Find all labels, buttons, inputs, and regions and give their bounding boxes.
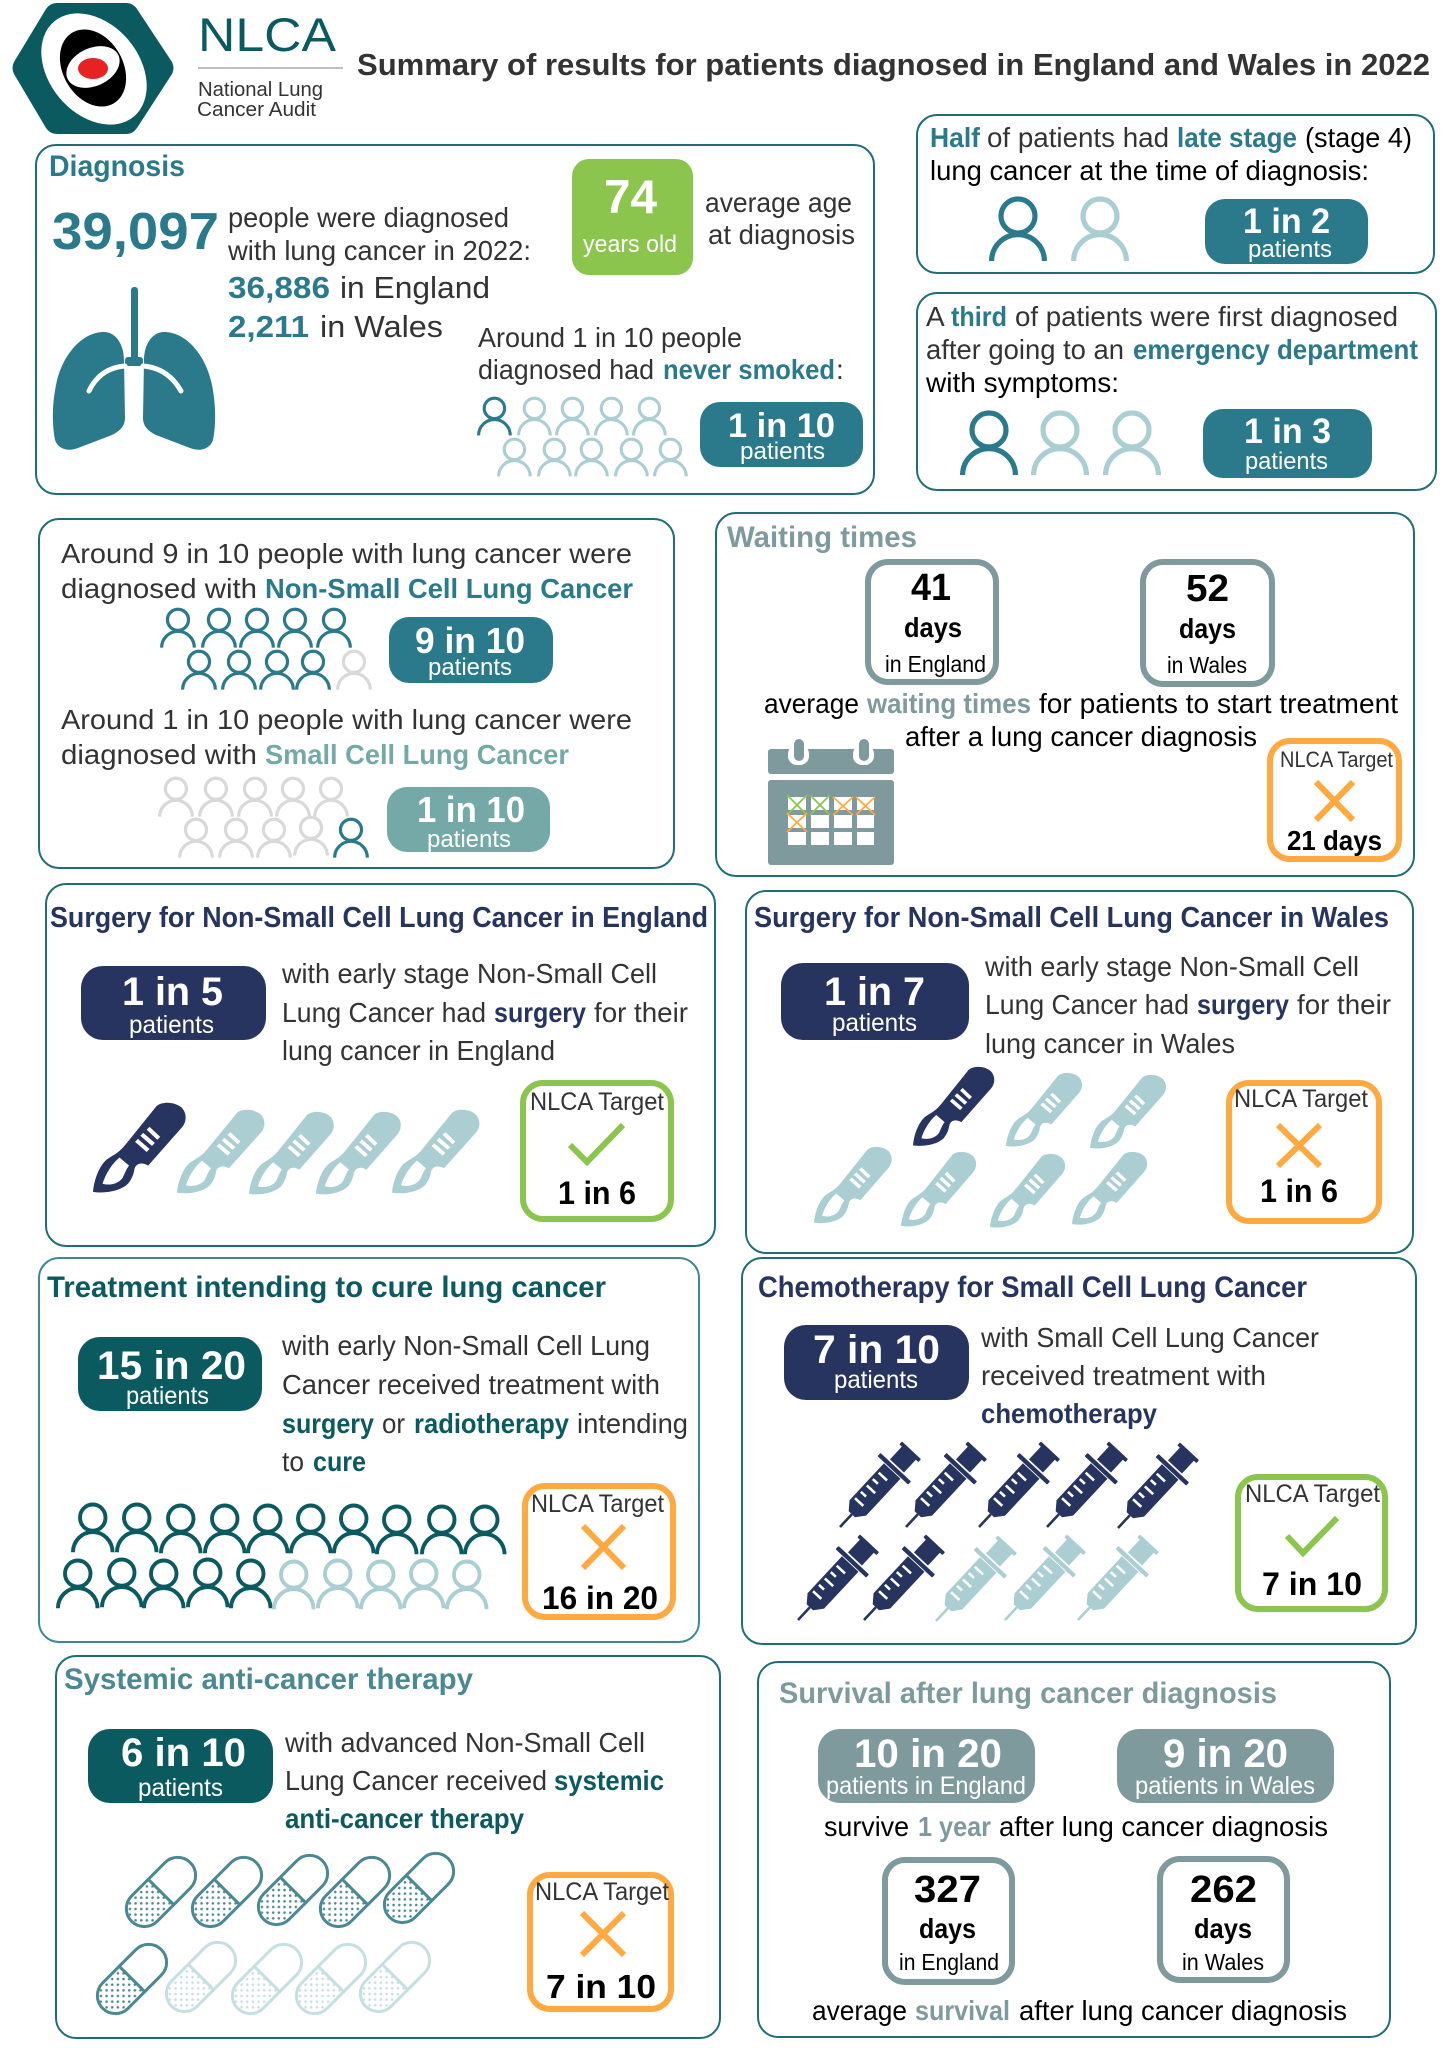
panel: systemic anti-cancer therapy bbox=[56, 1656, 720, 2038]
text block: for their bbox=[1297, 989, 1391, 1020]
stat pill: 1 in 3: 1 in 3 bbox=[1244, 412, 1331, 451]
stat pill: 1 in 7: patients bbox=[832, 1009, 917, 1037]
icon row: capsules 6 in 10 bbox=[90, 1846, 461, 2021]
text block: emergency department: A bbox=[926, 301, 945, 332]
number: total diagnosed: 39,097 bbox=[52, 203, 219, 261]
icon row: 9 in 10 people bbox=[162, 609, 370, 690]
text block: surgery bbox=[282, 1408, 374, 1439]
text block: with early stage Non-Small Cell bbox=[984, 951, 1359, 982]
text block: small cell: diagnosed with bbox=[61, 739, 257, 770]
stat pill: 1 in 7 bbox=[781, 963, 969, 1040]
stat box: 262 days Wales: days bbox=[1194, 1913, 1252, 1944]
stat box: 262 days Wales: in Wales bbox=[1182, 1949, 1264, 1975]
text block: lung cancer in Wales bbox=[985, 1028, 1235, 1059]
text block: one year survival bbox=[824, 1811, 1328, 1842]
heading: Waiting times: Waiting times bbox=[727, 521, 917, 554]
target box: 21 days: NLCA Target bbox=[1280, 747, 1393, 772]
stat pill: 1 in 2: 1 in 2 bbox=[1243, 202, 1330, 241]
text block: waiting times: after a lung cancer diagnosis bbox=[905, 721, 1257, 752]
stat pill: 1 in 3 bbox=[1203, 409, 1372, 478]
stat pill: 7 in 10 bbox=[784, 1325, 969, 1400]
stat pill: 6 in 10: patients bbox=[138, 1774, 223, 1802]
target box: 7 in 10 met: NLCA Target bbox=[1245, 1480, 1380, 1508]
callout: average age 74 bbox=[572, 159, 693, 275]
stat pill: 15 in 20: patients bbox=[126, 1382, 209, 1410]
heading: Treatment intending to cure lung cancer bbox=[47, 1271, 606, 1304]
text block: waiting times: waiting times bbox=[866, 688, 1031, 719]
text block: emergency department: after going to an bbox=[926, 334, 1124, 365]
icon row: 1 in 3 people bbox=[963, 413, 1158, 475]
text block: late stage: late stage bbox=[1177, 122, 1297, 153]
text block: average age: average age bbox=[705, 187, 852, 218]
text block: non-small cell bbox=[61, 538, 633, 604]
text block: surgery bbox=[1197, 989, 1289, 1020]
target box: 1 in 6 met bbox=[523, 1083, 671, 1219]
stat pill: 9 in 20 Wales: 9 in 20 bbox=[1163, 1732, 1288, 1776]
text block: never smoked: diagnosed had bbox=[478, 354, 654, 385]
text block: people diagnosed: in England bbox=[340, 270, 490, 305]
stat pill: 1 in 10 small cell bbox=[387, 787, 550, 853]
target box: 16 in 20 bbox=[525, 1486, 673, 1617]
stat box: 52 days Wales: in Wales bbox=[1167, 652, 1247, 678]
text block bbox=[284, 1727, 664, 1834]
text block: surgery bbox=[494, 997, 586, 1028]
text block: radiotherapy bbox=[414, 1408, 569, 1439]
text block: emergency department: emergency department bbox=[1133, 334, 1418, 365]
text block: anti-cancer therapy bbox=[285, 1803, 524, 1834]
text block: to bbox=[282, 1446, 304, 1477]
stat pill: 1 in 2: patients bbox=[1248, 236, 1332, 263]
text block: never smoked: never smoked bbox=[663, 354, 835, 385]
target box: 16 in 20: 16 in 20 bbox=[542, 1580, 658, 1616]
stat pill: 9 in 10: 9 in 10 bbox=[415, 620, 525, 661]
icon: calendar bbox=[768, 739, 894, 865]
target box: 1 in 6 met: NLCA Target bbox=[530, 1088, 664, 1116]
stat pill: 15 in 20 bbox=[78, 1337, 262, 1411]
stat pill: 9 in 20 Wales: patients in Wales bbox=[1135, 1772, 1315, 1800]
stat box: 327 days England bbox=[885, 1860, 1012, 1982]
title: Summary of results for patients diagnosed in England and Wales in 2022 bbox=[357, 47, 1430, 82]
target box: 21 days bbox=[1270, 741, 1399, 859]
text block: emergency department: of patients were first diagnosed bbox=[1015, 301, 1398, 332]
text block: average survival: survival bbox=[915, 1995, 1010, 2026]
target box: 7 in 10 met bbox=[1238, 1477, 1385, 1609]
logo subtitle bbox=[197, 79, 323, 121]
text block: emergency department: third bbox=[951, 301, 1007, 332]
stat pill: 10 in 20 England: patients in England bbox=[826, 1772, 1026, 1800]
stat pill: 1 in 5: 1 in 5 bbox=[122, 970, 223, 1014]
text block: late stage: Half bbox=[930, 122, 981, 153]
text block: late stage: lung cancer at the time of diagnosis: bbox=[930, 155, 1369, 186]
stat pill: 7 in 10: patients bbox=[834, 1366, 918, 1394]
target box: 1 in 6 not met bbox=[1229, 1083, 1379, 1221]
heading: Systemic anti-cancer therapy bbox=[64, 1663, 473, 1696]
text block: non-small cell: Non-Small Cell Lung Cancer bbox=[265, 573, 633, 604]
stat pill: 1 in 10 small cell: patients bbox=[427, 826, 511, 853]
text block: average survival: after lung cancer diagnosis bbox=[1019, 1995, 1347, 2026]
text block: late stage: (stage 4) bbox=[1305, 122, 1412, 153]
stat box: 41 days England bbox=[868, 562, 996, 682]
text block: systemic bbox=[554, 1765, 664, 1796]
text block: late stage bbox=[930, 122, 1412, 186]
text block bbox=[980, 1322, 1319, 1429]
stat box: 41 days England: days bbox=[904, 612, 962, 643]
stat pill: 6 in 10 bbox=[88, 1729, 273, 1803]
stat pill: 1 in 5: patients bbox=[129, 1011, 214, 1039]
text block: one year survival: after lung cancer diagnosis bbox=[999, 1811, 1328, 1842]
text block bbox=[984, 951, 1391, 1059]
stat pill: 1 in 10: patients bbox=[740, 438, 825, 465]
icon: lungs bbox=[53, 287, 215, 450]
text block bbox=[281, 958, 688, 1066]
panel: survival bbox=[758, 1662, 1390, 2037]
stat pill: 1 in 2 bbox=[1205, 199, 1368, 264]
stat pill: 1 in 3: patients bbox=[1245, 448, 1328, 475]
text block: with early stage Non-Small Cell bbox=[281, 958, 657, 989]
stat pill: 9 in 10 bbox=[389, 617, 553, 683]
icon row: syringes 7 in 10 bbox=[783, 1436, 1205, 1635]
stat pill: 1 in 10 small cell: 1 in 10 bbox=[417, 789, 525, 830]
text block bbox=[281, 1330, 688, 1477]
target box: 7 in 10 not met: NLCA Target bbox=[535, 1878, 669, 1906]
stat box: 327 days England: in England bbox=[899, 1949, 999, 1975]
stat box: 327 days England: 327 bbox=[914, 1869, 981, 1911]
stat pill: 1 in 5 bbox=[81, 966, 266, 1040]
logo: NLCA National Lung Cancer Audit bbox=[12, 0, 343, 145]
text block: Lung Cancer received bbox=[285, 1765, 547, 1796]
stat pill: 1 in 7: 1 in 7 bbox=[824, 970, 925, 1014]
panel: surgery England bbox=[46, 884, 715, 1246]
target box: 21 days: 21 days bbox=[1287, 825, 1382, 856]
text block: never smoked: : bbox=[836, 354, 844, 385]
target box: 1 in 6 not met: NLCA Target bbox=[1234, 1085, 1368, 1113]
icon row: 1 in 2 people bbox=[992, 199, 1126, 261]
text block: average age: at diagnosis bbox=[708, 219, 855, 250]
panel: waiting times bbox=[716, 513, 1414, 876]
text block: or bbox=[382, 1408, 405, 1439]
target box: 7 in 10 not met: 7 in 10 bbox=[546, 1968, 656, 2005]
text block: people diagnosed: with lung cancer in 2022: bbox=[227, 235, 531, 266]
text block: Lung Cancer had bbox=[985, 989, 1189, 1020]
text block: waiting times bbox=[764, 688, 1398, 752]
text block: Lung Cancer had bbox=[282, 997, 486, 1028]
icon row: 1 in 10 people small cell bbox=[160, 778, 367, 858]
text block: for their bbox=[594, 997, 688, 1028]
text block: emergency department bbox=[925, 301, 1418, 398]
text block: small cell: Small Cell Lung Cancer bbox=[265, 739, 569, 770]
text block: late stage: of patients had bbox=[987, 122, 1169, 153]
text block: never smoked bbox=[478, 322, 844, 385]
text block: non-small cell: Around 9 in 10 people with lung cancer were bbox=[61, 538, 632, 569]
text block: waiting times: for patients to start treatment bbox=[1039, 688, 1398, 719]
stat box: 41 days England: in England bbox=[885, 651, 986, 677]
stat pill: 9 in 10: patients bbox=[428, 654, 512, 681]
panel: treatment intending to cure bbox=[39, 1258, 699, 1642]
text block: chemotherapy bbox=[981, 1398, 1157, 1429]
icon row: 1 in 10 people bbox=[479, 398, 686, 476]
text block: small cell: Around 1 in 10 people with lung cancer were bbox=[61, 704, 632, 735]
panel: surgery Wales bbox=[746, 891, 1413, 1253]
logo wordmark: NLCA bbox=[198, 8, 337, 61]
target box: 7 in 10 not met bbox=[530, 1875, 671, 2009]
text block: average age bbox=[705, 187, 855, 250]
text block: average survival: average bbox=[812, 1995, 907, 2026]
stat box: 52 days Wales bbox=[1143, 562, 1272, 684]
text block: received treatment with bbox=[981, 1360, 1266, 1391]
text block: cure bbox=[313, 1446, 366, 1477]
icon row: 15 in 20 people bbox=[58, 1505, 505, 1609]
text block: emergency department: with symptoms: bbox=[925, 367, 1119, 398]
heading: Diagnosis: Diagnosis bbox=[49, 150, 185, 183]
stat box: 52 days Wales: 52 bbox=[1186, 568, 1229, 610]
panel: cancer types bbox=[39, 519, 674, 868]
panel: late stage bbox=[917, 115, 1434, 273]
text block: waiting times: average bbox=[764, 688, 859, 719]
heading: Survival after lung cancer diagnosis bbox=[779, 1677, 1277, 1710]
callout: average age 74: 74 bbox=[604, 170, 657, 223]
icon row: scalpels 1 in 5 bbox=[93, 1103, 479, 1194]
panel: chemotherapy bbox=[742, 1258, 1416, 1644]
text block: lung cancer in England bbox=[282, 1035, 555, 1066]
stat pill: 7 in 10: 7 in 10 bbox=[813, 1328, 940, 1372]
text block: non-small cell: diagnosed with bbox=[61, 573, 257, 604]
text block: people diagnosed bbox=[227, 202, 531, 344]
target box: 7 in 10 met: 7 in 10 bbox=[1262, 1566, 1362, 1602]
panel: diagnosis bbox=[36, 145, 874, 494]
text block: small cell bbox=[61, 704, 632, 770]
logo subtitle: Cancer Audit bbox=[197, 99, 316, 121]
panel: emergency department bbox=[917, 293, 1436, 490]
logo subtitle: National Lung bbox=[198, 79, 323, 101]
stat pill: 9 in 20 Wales bbox=[1117, 1729, 1334, 1803]
text block: people diagnosed: 36,886 bbox=[228, 270, 330, 305]
text block: one year survival: 1 year bbox=[918, 1811, 991, 1842]
stat pill: 1 in 10: 1 in 10 bbox=[728, 407, 835, 445]
heading: Surgery for Non-Small Cell Lung Cancer in Wales bbox=[754, 902, 1389, 934]
text block: with Small Cell Lung Cancer bbox=[980, 1322, 1319, 1353]
target box: 1 in 6 met: 1 in 6 bbox=[558, 1175, 636, 1211]
text block: people diagnosed: in Wales bbox=[320, 309, 443, 344]
text block: people diagnosed: 2,211 bbox=[228, 309, 309, 344]
stat box: 262 days Wales bbox=[1160, 1859, 1287, 1980]
text block: with advanced Non-Small Cell bbox=[284, 1727, 645, 1758]
heading: Surgery for Non-Small Cell Lung Cancer in England bbox=[50, 902, 708, 934]
stat box: 41 days England: 41 bbox=[911, 567, 951, 609]
text block: with early Non-Small Cell Lung bbox=[281, 1330, 650, 1361]
stat pill: 10 in 20 England: 10 in 20 bbox=[854, 1732, 1002, 1776]
stat box: 262 days Wales: 262 bbox=[1190, 1869, 1257, 1911]
stat pill: 6 in 10: 6 in 10 bbox=[121, 1731, 246, 1775]
target box: 16 in 20: NLCA Target bbox=[531, 1490, 664, 1518]
stat box: 327 days England: days bbox=[919, 1913, 976, 1944]
heading: Chemotherapy for Small Cell Lung Cancer bbox=[758, 1271, 1307, 1304]
stat pill: 15 in 20: 15 in 20 bbox=[97, 1344, 246, 1388]
stat pill: 10 in 20 England bbox=[818, 1729, 1035, 1803]
icon: NLCA hexagon eye bbox=[12, 0, 174, 145]
stat pill: 1 in 10 bbox=[700, 402, 863, 467]
icon row: scalpels 1 in 7 bbox=[814, 1067, 1166, 1228]
text block: intending bbox=[577, 1408, 688, 1439]
target box: 1 in 6 not met: 1 in 6 bbox=[1260, 1173, 1338, 1209]
text block: never smoked: Around 1 in 10 people bbox=[478, 322, 742, 353]
text block: average survival bbox=[812, 1995, 1347, 2026]
text block: Cancer received treatment with bbox=[282, 1369, 660, 1400]
stat box: 52 days Wales: days bbox=[1179, 613, 1236, 644]
text block: one year survival: survive bbox=[824, 1811, 909, 1842]
text block: people diagnosed: people were diagnosed bbox=[228, 202, 509, 233]
callout: average age 74: years old bbox=[583, 231, 677, 258]
